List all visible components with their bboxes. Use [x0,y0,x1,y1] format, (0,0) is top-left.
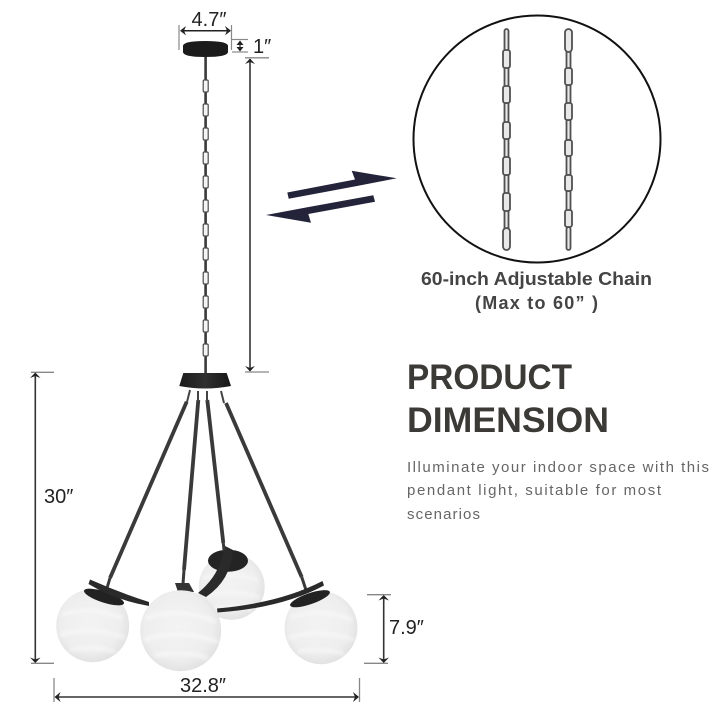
center globe [140,583,221,671]
title: DIMENSION [407,401,609,440]
dimension: chain length [245,58,269,372]
right crescent arm [217,581,324,612]
description text: Illuminate your indoor space with this [407,459,709,476]
dimension: globe 7.9 inch [364,595,424,663]
back globe [199,550,265,620]
left chain detail [503,29,510,250]
dimension: height 30 inch: 30″ [44,486,73,508]
left crescent arm [88,580,149,606]
chain caption: (Max to 60” ) [475,293,598,313]
chain caption: 60-inch Adjustable Chain [421,269,652,289]
ceiling plate [183,41,228,57]
dimension: canopy height 1 inch: 1″ [253,36,271,58]
dimension: height 30 inch [30,372,73,663]
double arrows [266,171,397,223]
back bracket [198,546,233,597]
dimension: canopy width 4.7 inch [179,9,232,50]
right globe [284,587,358,664]
title [407,358,609,440]
chain caption [421,269,652,313]
chandelier [56,373,357,671]
dimension: width 32.8 inch: 32.8″ [180,675,226,697]
dimension: canopy width 4.7 inch: 4.7″ [192,9,226,31]
dimension: width 32.8 inch [54,675,360,702]
description text: pendant light, suitable for most [407,482,662,499]
dimension: canopy height 1 inch [232,36,271,58]
title: PRODUCT [407,358,572,397]
description text: scenarios [407,506,480,523]
dimension: globe 7.9 inch: 7.9″ [389,617,424,639]
pendant canopy [179,373,231,388]
right chain detail [565,29,572,250]
hanging chain [203,57,208,373]
support arms [107,400,306,590]
chain detail circle [414,16,660,262]
hook joints [187,390,224,403]
left globe [56,585,129,662]
description text [407,459,709,523]
